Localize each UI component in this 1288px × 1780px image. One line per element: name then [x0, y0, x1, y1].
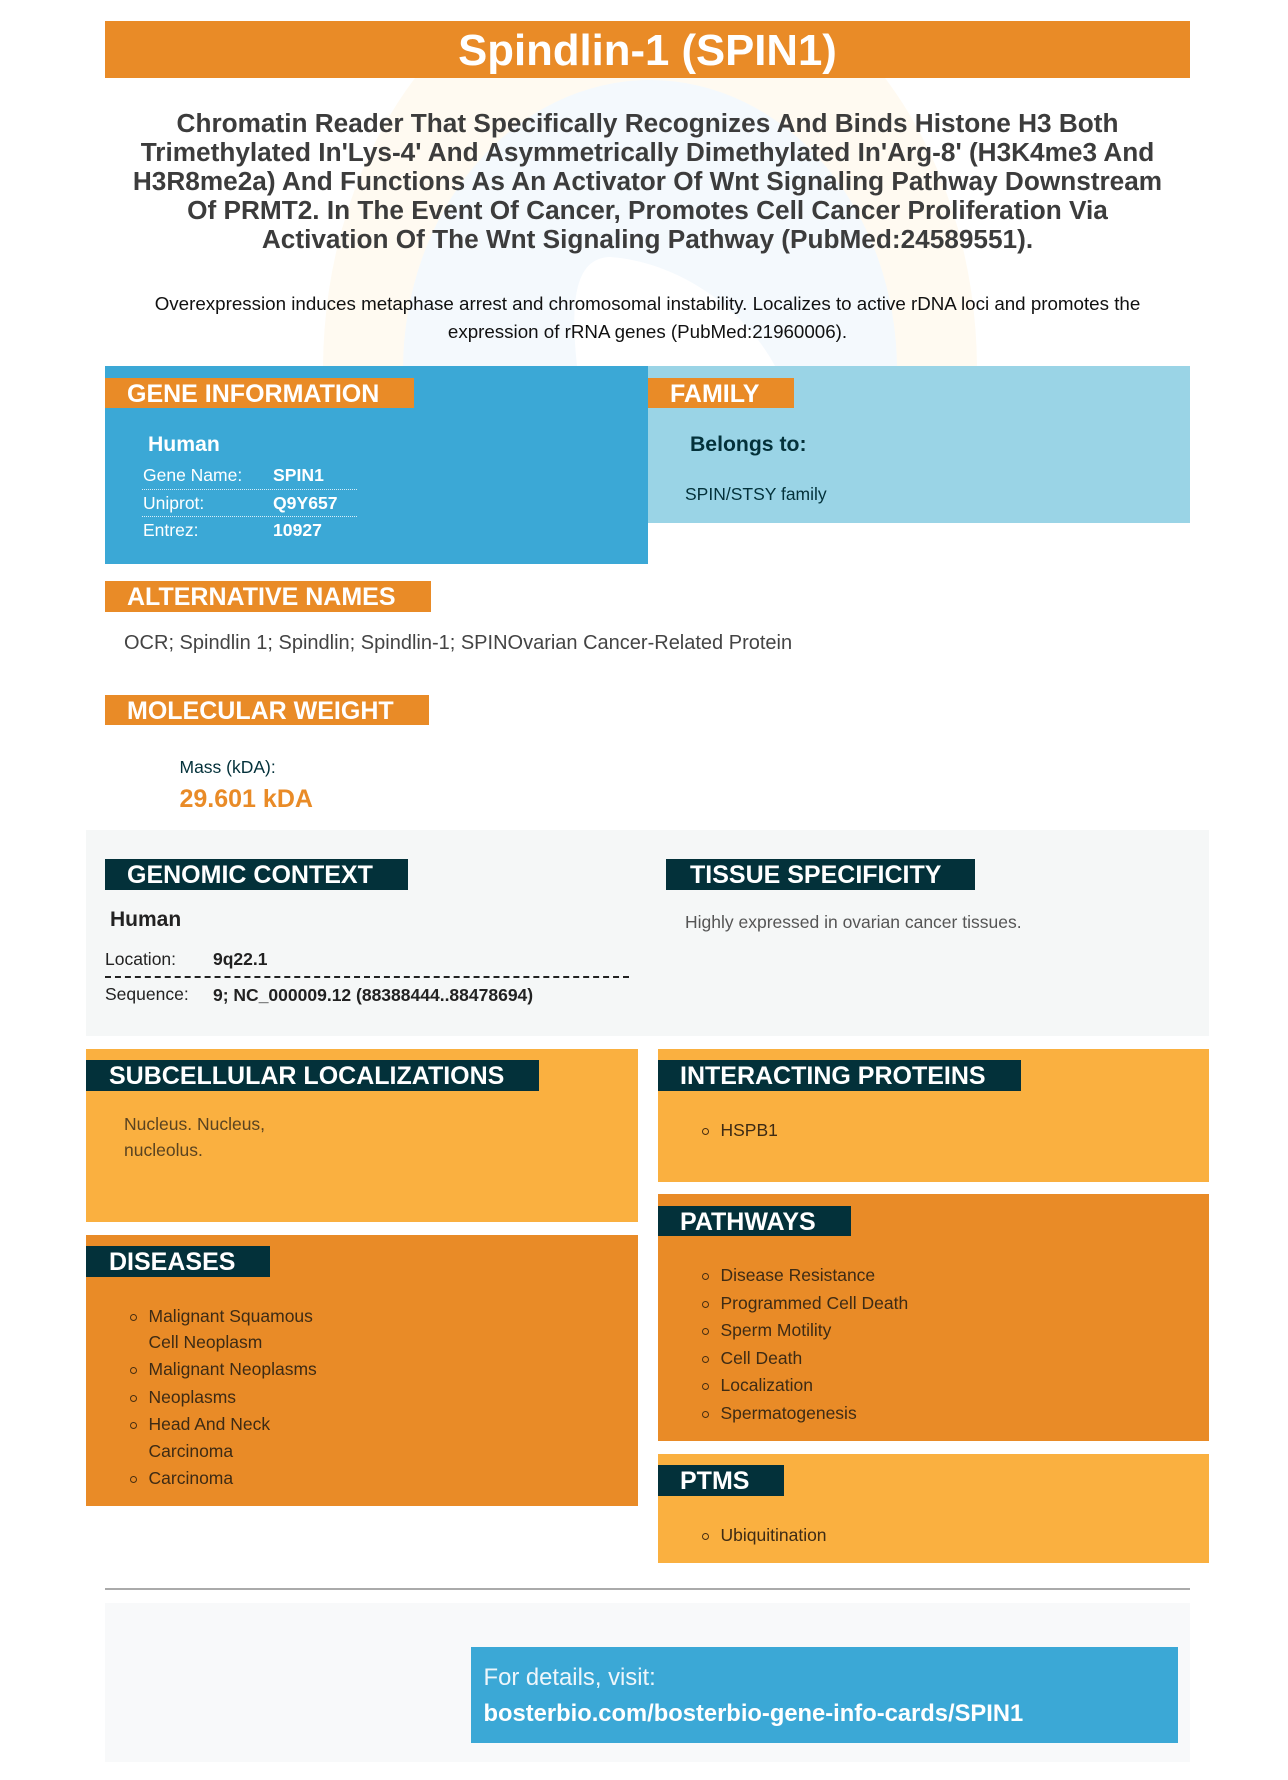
heading: ptms — [658, 1465, 784, 1496]
entrez row: Entrez: — [143, 520, 198, 540]
heading: molecular weight: MOLECULAR WEIGHT — [127, 697, 394, 725]
callout: details link: bosterbio.com/bosterbio-gene-info-cards/SPIN1 — [484, 1700, 1023, 1726]
tissue specificity text: Highly expressed in ovarian cancer tissues. — [685, 912, 1022, 932]
localization text: nucleolus. — [124, 1140, 203, 1160]
footer panel — [105, 1603, 1190, 1762]
heading: pathways — [658, 1206, 851, 1236]
heading: family — [648, 378, 794, 408]
heading: ptms: PTMS — [680, 1467, 749, 1495]
callout: details link — [471, 1647, 1178, 1743]
heading: subcellular localizations: SUBCELLULAR LOCALIZATIONS — [109, 1062, 504, 1090]
pathway list: Cell Death — [720, 1348, 802, 1368]
localization text: Nucleus. Nucleus, — [124, 1114, 265, 1134]
sequence row: Sequence: — [105, 984, 189, 1004]
gene name row — [143, 465, 324, 485]
interacting protein list: HSPB1 — [720, 1120, 778, 1140]
summary paragraph — [155, 293, 1140, 342]
uniprot row: Q9Y657 — [273, 493, 338, 513]
disease list: Head And Neck — [148, 1414, 270, 1434]
heading: family: FAMILY — [670, 380, 759, 408]
title banner — [105, 21, 1190, 78]
heading: alternative names: ALTERNATIVE NAMES — [127, 583, 396, 611]
panel: ptms — [658, 1454, 1209, 1563]
uniprot row — [143, 493, 338, 513]
alternative names text: OCR; Spindlin 1; Spindlin; Spindlin-1; SPINOvarian Cancer-Related Protein — [124, 632, 792, 654]
disease list: Carcinoma — [148, 1468, 233, 1488]
headline description: H3R8me2a) And Functions As An Activator Of Wnt Signaling Pathway Downstream — [133, 166, 1162, 196]
location row: Location: — [105, 949, 176, 969]
headline description: Activation Of The Wnt Signaling Pathway (PubMed:24589551). — [262, 224, 1033, 254]
panel: pathways — [658, 1194, 1209, 1441]
pathway list: Programmed Cell Death — [720, 1293, 908, 1313]
headline description: Trimethylated In'Lys-4' And Asymmetrically Dimethylated In'Arg-8' (H3K4me3 And — [141, 137, 1154, 167]
gene name row: SPIN1 — [273, 465, 324, 485]
summary paragraph: Overexpression induces metaphase arrest and chromosomal instability. Localizes to active rDNA loci and promotes the — [155, 293, 1140, 314]
localization text — [124, 1114, 265, 1160]
heading: pathways: PATHWAYS — [680, 1208, 816, 1236]
heading: diseases — [86, 1246, 270, 1277]
headline description — [133, 108, 1162, 254]
heading: diseases: DISEASES — [109, 1248, 235, 1276]
gene name row: Gene Name: — [143, 465, 242, 485]
pathway list: Spermatogenesis — [720, 1403, 857, 1423]
pathway list: Sperm Motility — [720, 1320, 831, 1340]
heading: gene information: GENE INFORMATION — [127, 380, 379, 408]
summary paragraph: expression of rRNA genes (PubMed:21960006). — [448, 321, 847, 342]
panel: family — [648, 366, 1190, 523]
mass value: 29.601 kDA — [180, 785, 313, 813]
belongs to label: Belongs to: — [690, 433, 807, 456]
headline description: Chromatin Reader That Specifically Recognizes And Binds Histone H3 Both — [177, 108, 1118, 138]
title banner: Spindlin-1 (SPIN1) — [458, 26, 837, 75]
species label: Human — [148, 433, 220, 456]
heading: interacting proteins: INTERACTING PROTEINS — [680, 1062, 986, 1090]
callout: details link: For details, visit: — [484, 1664, 656, 1691]
sequence row: 9; NC_000009.12 (88388444..88478694) — [213, 985, 533, 1005]
disease list: Malignant Neoplasms — [148, 1359, 317, 1379]
uniprot row: Uniprot: — [143, 493, 204, 513]
disease list: Carcinoma — [148, 1441, 233, 1461]
family value: SPIN/STSY family — [685, 484, 827, 504]
mass label: Mass (kDA): — [180, 757, 276, 777]
panel: genomic context and tissue specificity — [86, 830, 1209, 1036]
pathway list: Localization — [720, 1375, 813, 1395]
entrez row — [143, 520, 322, 540]
panel: interacting proteins — [658, 1049, 1209, 1182]
ptm list: Ubiquitination — [720, 1525, 827, 1545]
panel: gene information — [105, 366, 648, 564]
species label: Human — [110, 908, 181, 931]
pathway list — [702, 1265, 908, 1423]
headline description: Of PRMT2. In The Event Of Cancer, Promotes Cell Cancer Proliferation Via — [187, 195, 1108, 225]
heading: genomic context: GENOMIC CONTEXT — [127, 861, 373, 889]
disease list — [130, 1306, 317, 1488]
disease list: Cell Neoplasm — [148, 1332, 262, 1352]
disease list: Malignant Squamous — [148, 1306, 313, 1326]
panel: diseases — [86, 1235, 638, 1506]
location row — [105, 949, 267, 969]
entrez row: 10927 — [273, 520, 322, 540]
heading: tissue specificity: TISSUE SPECIFICITY — [690, 861, 941, 889]
panel: subcellular localizations — [86, 1049, 638, 1222]
pathway list: Disease Resistance — [720, 1265, 875, 1285]
location row: 9q22.1 — [213, 949, 267, 969]
watermark logo — [323, 78, 977, 366]
disease list: Neoplasms — [148, 1387, 236, 1407]
